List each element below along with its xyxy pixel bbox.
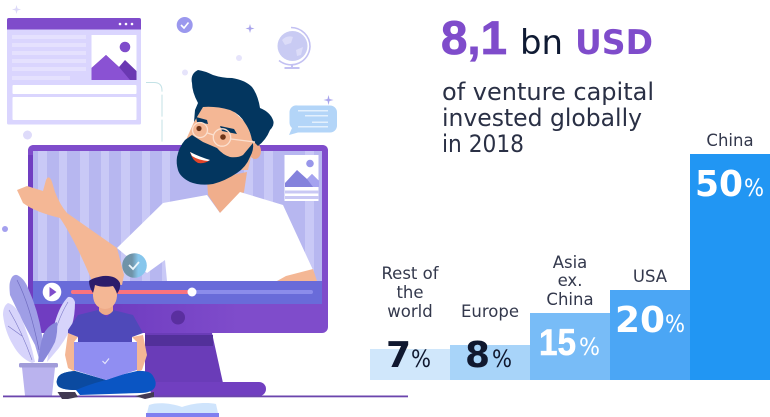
plant <box>3 275 75 396</box>
headline: 8,1 bn USD: 8,1 <box>441 11 507 64</box>
icon: globe <box>278 28 310 69</box>
headline: 8,1 bn USD: USD <box>575 23 653 63</box>
monitor body <box>28 145 328 333</box>
arm and hand <box>17 177 124 285</box>
bar: China: 50 <box>695 164 743 205</box>
arms <box>65 333 147 372</box>
floor line <box>3 396 408 397</box>
hair <box>192 70 274 146</box>
bar: USA: 20 <box>615 300 665 341</box>
bar: Rest of the world <box>370 264 450 380</box>
bar: USA: % <box>665 310 685 338</box>
seated person <box>57 276 156 399</box>
subtitle <box>442 78 654 158</box>
bar: Rest of the world: % <box>411 345 431 373</box>
subtitle: of venture capital <box>442 78 654 106</box>
beard <box>177 135 253 185</box>
hair <box>89 276 120 294</box>
headline: 8,1 bn USD: bn <box>520 23 563 63</box>
screen stripes <box>33 151 322 282</box>
back leaf <box>10 275 42 362</box>
right leaf <box>47 297 75 362</box>
neck <box>207 172 247 213</box>
bar: Asia ex. China: % <box>579 333 600 361</box>
glasses <box>192 122 255 146</box>
open book <box>146 403 219 417</box>
bar chart <box>370 131 770 380</box>
bar: Rest of the world: Rest of <box>381 264 440 283</box>
video control bar <box>33 281 322 304</box>
screen image card <box>284 155 319 201</box>
left leaf <box>3 303 35 363</box>
small leaf <box>38 322 57 362</box>
bar: Europe: % <box>492 345 512 373</box>
subtitle: invested globally <box>442 104 642 132</box>
icon: speech bubble <box>289 105 337 135</box>
bar: Rest of the world: the <box>396 283 424 302</box>
bar: Europe <box>450 302 530 380</box>
eyes <box>196 126 226 140</box>
ear <box>249 143 261 159</box>
bar: Europe: 8 <box>465 335 490 376</box>
neck <box>99 302 113 315</box>
pot <box>19 363 58 368</box>
laptop <box>74 342 137 380</box>
headline: 8,1 bn USD <box>441 11 653 64</box>
dashed connector <box>146 82 162 142</box>
legs <box>57 371 156 395</box>
bar: China: % <box>744 174 764 202</box>
bar: Asia ex. China: China <box>546 290 594 309</box>
icon: wrist check badge <box>122 253 147 278</box>
illustration <box>2 5 408 417</box>
bar: USA <box>610 267 690 380</box>
bar: China: China <box>706 131 754 150</box>
mouth <box>190 152 210 163</box>
monitor camera <box>171 310 185 324</box>
bar: Rest of the world: world <box>387 302 433 321</box>
face <box>185 106 254 170</box>
head <box>93 284 117 309</box>
bar: China <box>690 131 770 380</box>
bar: Asia ex. China: Asia <box>553 253 587 272</box>
t-shirt <box>68 310 143 343</box>
bar: Europe: Europe <box>461 302 519 321</box>
icon: check badge <box>177 17 193 33</box>
bar: Asia ex. China: 15 <box>539 322 576 363</box>
bar: Asia ex. China: ex. <box>558 271 582 290</box>
bar: Rest of the world: 7 <box>386 335 411 376</box>
presenter <box>17 70 317 285</box>
browser window <box>7 18 141 124</box>
bar: USA: USA <box>633 267 668 286</box>
subtitle: in 2018 <box>442 130 524 158</box>
monitor stand <box>145 333 223 383</box>
shoes <box>58 392 154 399</box>
decorative sparkles and dots <box>2 5 334 232</box>
shirt <box>117 192 313 281</box>
eyebrows <box>196 117 237 134</box>
monitor <box>28 145 328 396</box>
bar: Asia ex. China <box>530 253 610 380</box>
